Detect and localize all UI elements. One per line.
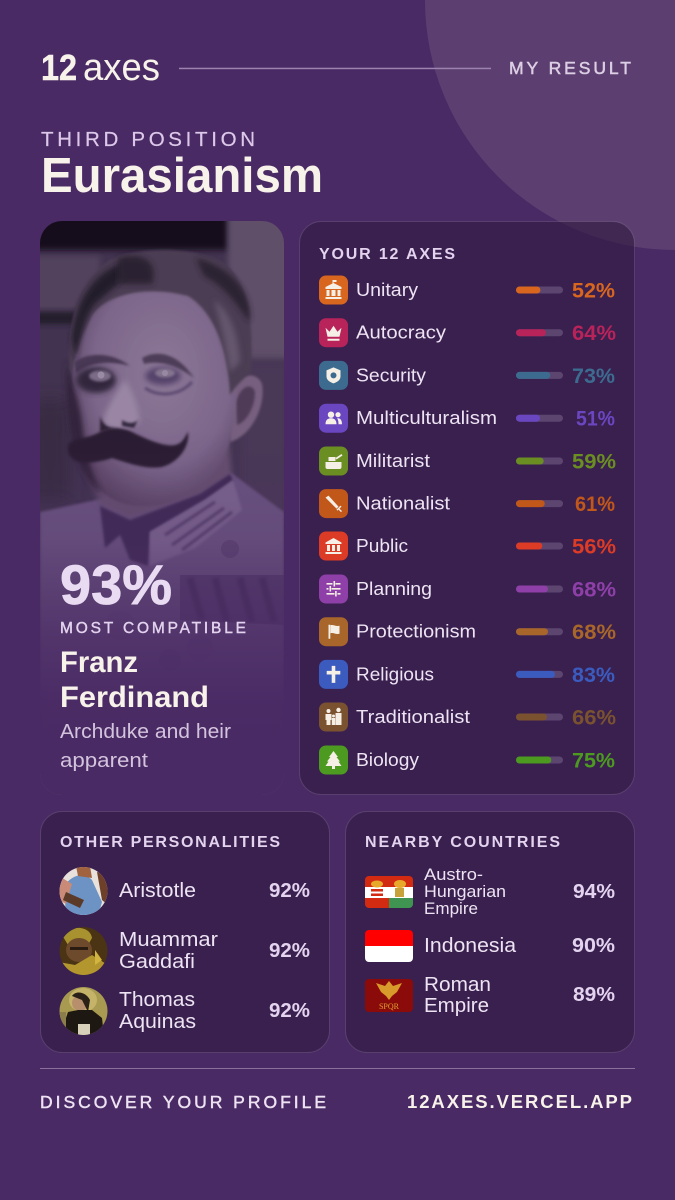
- avatar: Aristotle: [59, 866, 108, 916]
- name: Austro-Hungarian Empire: Hungarian: [424, 883, 506, 901]
- avatar: Muammar Gaddafi: [59, 927, 108, 976]
- panel: most compatible portrait card: [40, 221, 284, 795]
- name: Thomas Aquinas: [119, 989, 196, 1033]
- name: Franz Ferdinand: [60, 646, 209, 714]
- left face shadow: [66, 360, 102, 495]
- row: Planning: [319, 574, 616, 604]
- row: Nationalist: Nationalist: [356, 494, 450, 514]
- row: Protectionism: 68%: [572, 621, 616, 644]
- panel: nearby countries: [346, 812, 634, 1052]
- row: Public: Public: [356, 536, 408, 556]
- heading: your 12 axes: YOUR 12 AXES: [319, 246, 455, 263]
- label: most compatible: MOST COMPATIBLE: [60, 620, 246, 637]
- row: Public: [319, 532, 616, 560]
- title: Eurasianism: Eurasianism: [41, 149, 323, 203]
- score: Roman Empire: 89%: [573, 984, 615, 1006]
- row: Militarist: Militarist: [356, 451, 430, 471]
- row: Traditionalist: Traditionalist: [356, 707, 470, 727]
- description: apparent: [60, 750, 148, 772]
- heading: nearby countries: NEARBY COUNTRIES: [365, 834, 560, 851]
- row: Nationalist: 61%: [575, 493, 615, 516]
- flag: Austro-Hungarian Empire: [365, 876, 413, 908]
- footer rule: [40, 1068, 635, 1069]
- panel: your 12 axes: [300, 222, 634, 794]
- description: [60, 721, 231, 772]
- name: Roman Empire: Empire: [424, 995, 489, 1017]
- name: Indonesia: Indonesia: [424, 935, 517, 957]
- logo: 12 axes: [41, 47, 160, 89]
- moustache: [68, 428, 188, 468]
- row: Unitary: 52%: [572, 280, 615, 302]
- row: Biology: Biology: [356, 750, 419, 770]
- name: Austro-Hungarian Empire: [424, 866, 506, 918]
- row: Nationalist: [319, 489, 615, 518]
- logo: 12 axes: 12: [41, 47, 77, 88]
- row: Autocracy: [319, 318, 616, 347]
- ear: [226, 375, 263, 442]
- face: [72, 284, 236, 506]
- row: Autocracy: 64%: [572, 322, 616, 345]
- hair: [69, 250, 252, 395]
- row: Traditionalist: [319, 702, 616, 732]
- row: Traditionalist: 66%: [572, 706, 616, 730]
- row: Public: 56%: [572, 536, 616, 558]
- name: Roman Empire: [424, 974, 491, 1017]
- row: Planning: 68%: [572, 578, 616, 602]
- name: Muammar Gaddafi: [119, 929, 218, 973]
- uniform: [40, 472, 284, 800]
- flag: Roman Empire: SPQR: [379, 1002, 400, 1011]
- row: Biology: 75%: [572, 750, 615, 772]
- flag: Roman Empire: [365, 979, 413, 1012]
- row: Militarist: [319, 446, 616, 476]
- name: Muammar Gaddafi: Gaddafi: [119, 951, 195, 973]
- row: Security: 73%: [572, 365, 615, 388]
- row: Unitary: [319, 276, 615, 304]
- subtitle: third position: THIRD POSITION: [41, 128, 255, 151]
- score: Indonesia: 90%: [572, 935, 615, 957]
- row: Security: Security: [356, 365, 426, 385]
- score: 93%: 93%: [60, 553, 172, 616]
- name: Muammar Gaddafi: Muammar: [119, 929, 218, 951]
- row: Religious: [319, 660, 615, 689]
- name: Austro-Hungarian Empire: Austro-: [424, 866, 483, 884]
- row: Unitary: Unitary: [356, 280, 418, 300]
- name: Franz Ferdinand: Ferdinand: [60, 681, 209, 714]
- collar: [100, 474, 233, 566]
- row: Security: [319, 361, 615, 390]
- brows: [74, 355, 130, 374]
- fade overlay: [40, 505, 284, 795]
- decorative circle: [425, 0, 675, 250]
- logo: 12 axes: axes: [83, 47, 160, 89]
- row: Religious: 83%: [572, 664, 615, 687]
- score: Thomas Aquinas: 92%: [269, 1000, 310, 1022]
- name: Thomas Aquinas: Thomas: [119, 989, 195, 1011]
- name: Austro-Hungarian Empire: Empire: [424, 900, 478, 918]
- row: Multiculturalism: [319, 404, 615, 433]
- heading: other personalities: OTHER PERSONALITIES: [60, 834, 280, 851]
- name: Franz Ferdinand: Franz: [60, 646, 138, 679]
- eyes: [76, 367, 116, 393]
- row: Protectionism: [319, 617, 616, 646]
- description: Archduke and heir: [60, 721, 231, 743]
- neck: [91, 443, 234, 516]
- footer: site url: 12AXES.VERCEL.APP: [407, 1091, 632, 1112]
- row: Multiculturalism: 51%: [576, 408, 615, 431]
- panel: other personalities: [40, 812, 330, 1052]
- row: Multiculturalism: Multiculturalism: [356, 408, 497, 428]
- name: Thomas Aquinas: Aquinas: [119, 1011, 196, 1033]
- footer: discover your profile: DISCOVER YOUR PROFILE: [40, 1092, 326, 1112]
- name: Aristotle: Aristotle: [119, 880, 196, 902]
- label: my result: MY RESULT: [509, 58, 631, 78]
- flag: Indonesia: [365, 930, 413, 962]
- nose: [104, 380, 140, 429]
- row: Planning: Planning: [356, 579, 432, 599]
- row: Autocracy: Autocracy: [356, 323, 446, 343]
- score: Austro-Hungarian Empire: 94%: [573, 881, 615, 903]
- avatar: Thomas Aquinas: [59, 987, 108, 1036]
- name: Roman Empire: Roman: [424, 974, 491, 996]
- row: Biology: [319, 746, 615, 774]
- row: Militarist: 59%: [572, 450, 616, 474]
- score: Aristotle: 92%: [269, 880, 310, 902]
- header rule: [179, 68, 491, 69]
- score: Muammar Gaddafi: 92%: [269, 940, 310, 962]
- portrait illustration: [40, 221, 284, 795]
- row: Religious: Religious: [356, 664, 434, 684]
- medals: [221, 540, 239, 558]
- row: Protectionism: Protectionism: [356, 622, 476, 642]
